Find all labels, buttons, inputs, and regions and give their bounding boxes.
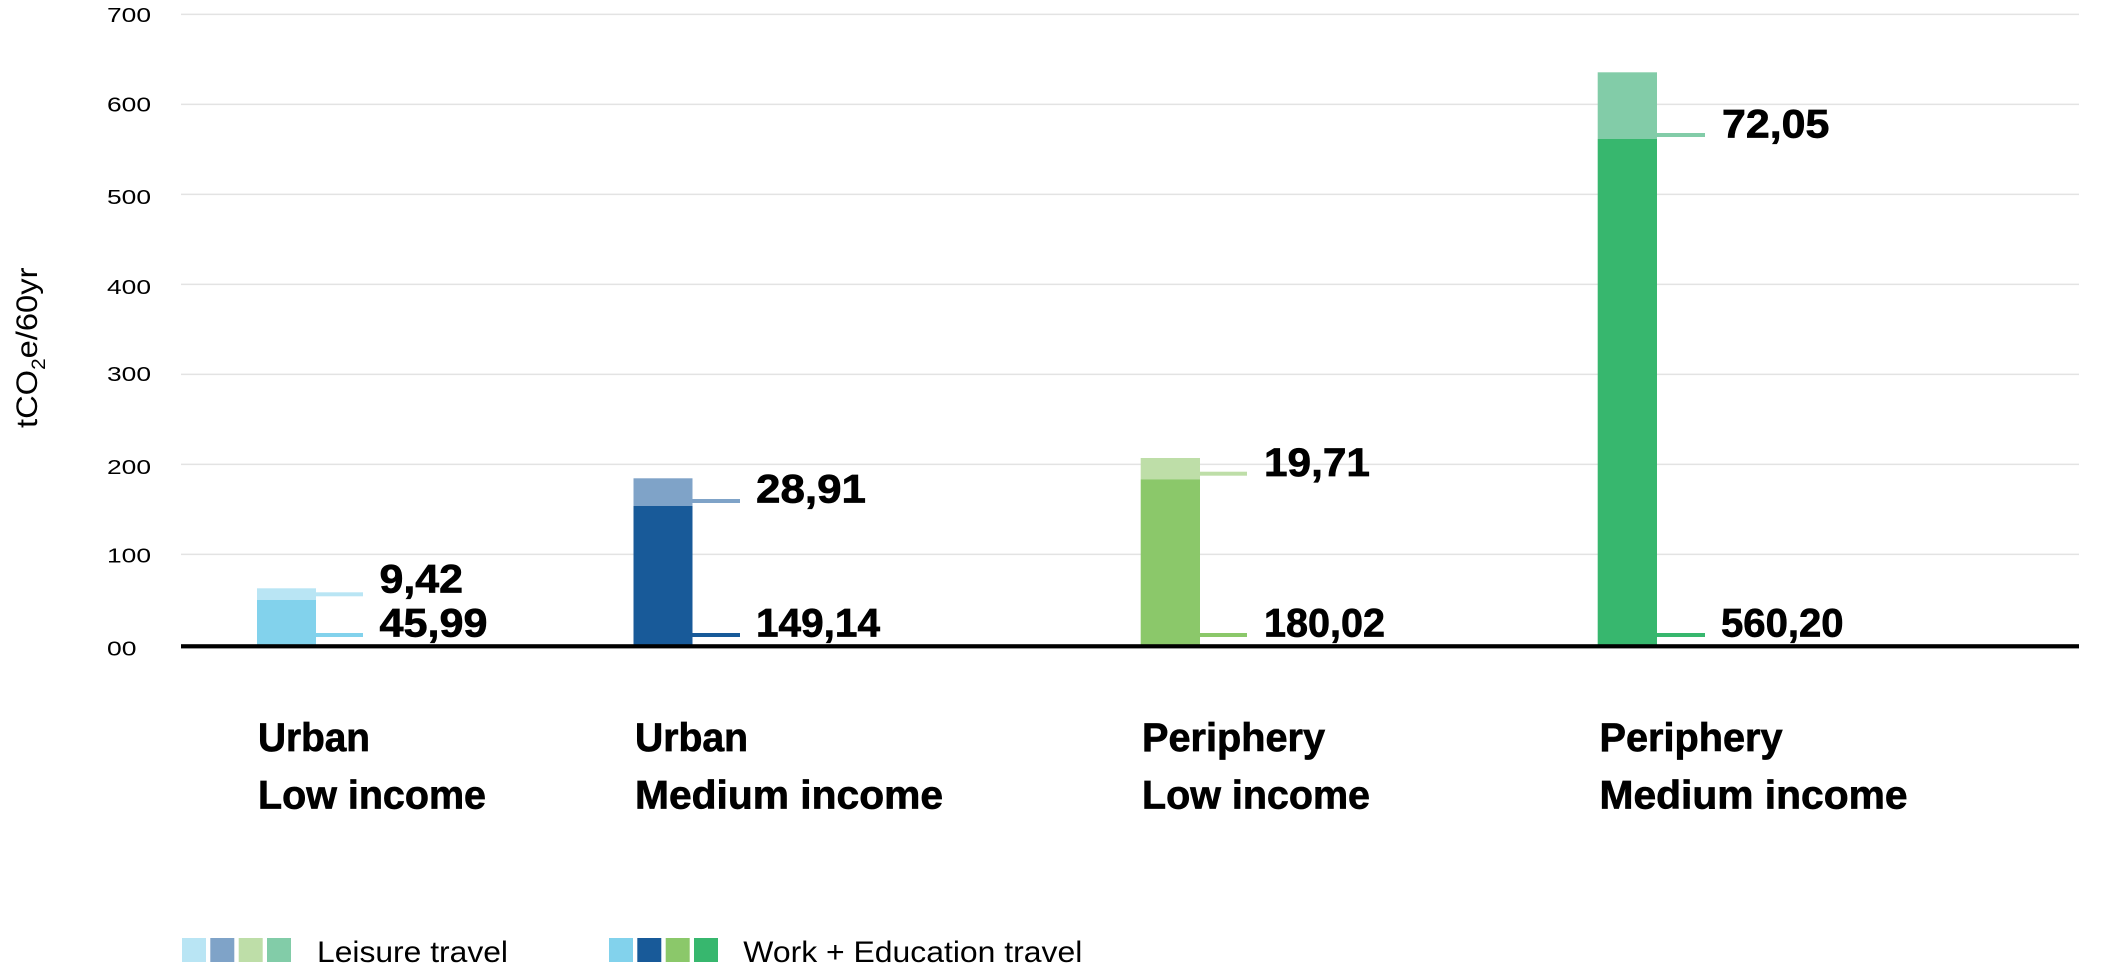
category label: urban low income: Urban (258, 716, 370, 760)
bar: urban medium income: 28,91 (756, 468, 866, 512)
category label: urban low income (258, 716, 486, 817)
category label: urban low income: Low income (258, 773, 486, 817)
category label: periphery low income (1142, 716, 1370, 817)
bar: periphery medium income: 72,05 (1722, 103, 1829, 147)
category label: urban medium income: Urban (635, 716, 748, 760)
category label: periphery medium income (1600, 716, 1908, 817)
category label: periphery low income: Periphery (1142, 716, 1326, 760)
bar: urban low income (257, 558, 488, 646)
y axis title: 2 (29, 358, 50, 370)
y axis tick labels: 600 (107, 94, 151, 117)
bar: urban low income: 45,99 (380, 602, 488, 646)
bar: urban medium income (634, 468, 881, 646)
y axis tick labels: 00 (107, 638, 136, 661)
category label: periphery medium income: Medium income (1600, 773, 1908, 817)
y axis tick labels: 400 (107, 276, 151, 299)
bar: periphery low income: 19,71 (1264, 441, 1370, 485)
bar: periphery medium income: 560,20 (1721, 602, 1844, 646)
category label: periphery low income: Low income (1142, 773, 1370, 817)
y axis tick labels: 700 (107, 4, 151, 27)
bar: periphery low income (1141, 441, 1385, 646)
category label: periphery medium income: Periphery (1600, 716, 1783, 760)
category label: urban medium income: Medium income (635, 773, 943, 817)
bar: periphery medium income (1598, 72, 1844, 646)
y axis title: tCO (10, 370, 44, 428)
bar: urban medium income: 149,14 (756, 602, 881, 646)
bar: periphery low income: 180,02 (1264, 602, 1385, 646)
legend: leisure travel (182, 936, 508, 969)
bar: urban low income: 9,42 (380, 558, 463, 602)
y axis tick labels: 500 (107, 186, 151, 209)
category label: urban medium income (635, 716, 943, 817)
y axis tick labels (107, 4, 151, 661)
y axis tick labels: 300 (107, 363, 151, 386)
x axis baseline (181, 644, 2079, 648)
y axis title: e/60yr (10, 268, 44, 358)
y axis tick labels: 100 (107, 545, 151, 568)
legend: work and education travel (609, 936, 1082, 969)
legend: leisure travel: Leisure travel (317, 936, 508, 969)
y axis tick labels: 200 (107, 456, 151, 479)
legend: work and education travel: Work + Education travel (743, 936, 1082, 969)
